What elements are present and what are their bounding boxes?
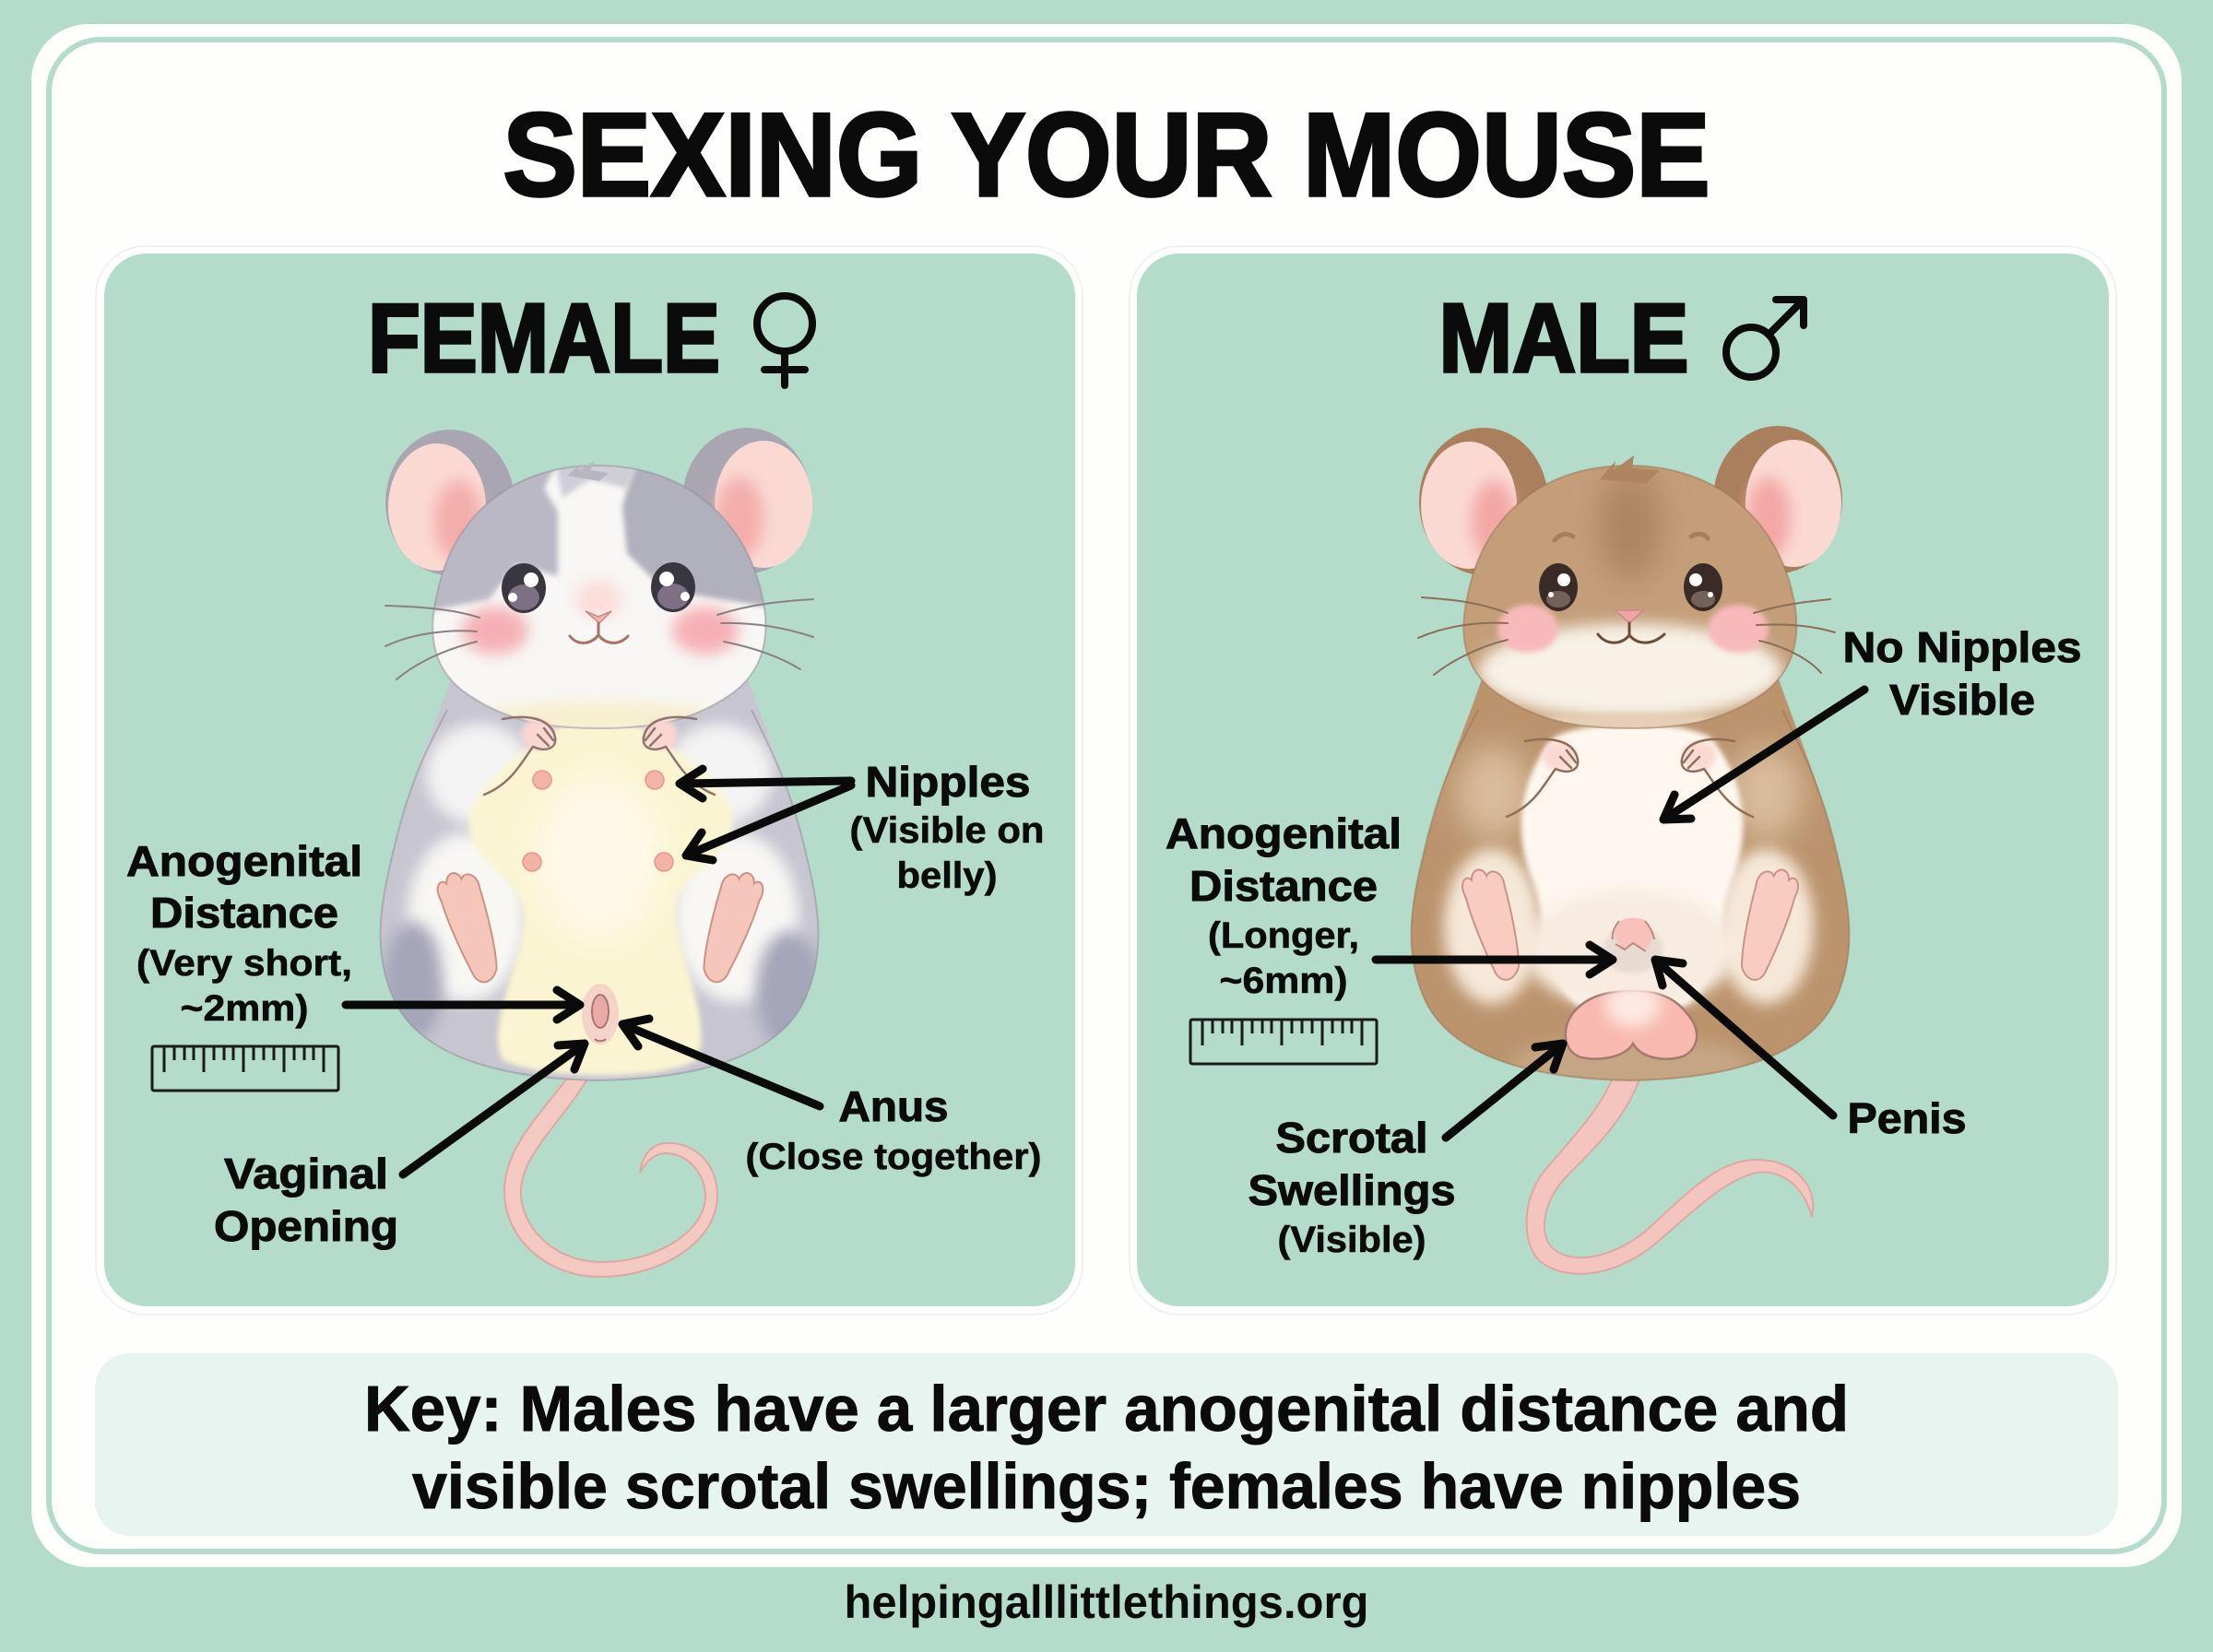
nose and mouth — [570, 611, 628, 643]
icon: ruler female — [152, 1046, 338, 1091]
key text — [364, 1373, 1849, 1522]
arrow: nipples upper — [680, 769, 851, 798]
right ear — [682, 428, 812, 573]
label: nipples: belly) — [896, 856, 998, 896]
heading: male: MALE — [1438, 284, 1689, 393]
label: anogenital distance female: ~2mm) — [181, 988, 308, 1029]
vaginal opening and anus — [582, 984, 619, 1044]
tuft — [567, 461, 609, 481]
left eye — [502, 563, 546, 613]
label: scrotal swellings: Scrotal — [1276, 1114, 1427, 1162]
tuft — [1600, 455, 1660, 484]
head — [1463, 466, 1796, 728]
heading: female: FEMALE — [368, 284, 720, 393]
arrow: anogenital distance male — [1376, 945, 1613, 974]
label: no nipples visible: Visible — [1889, 676, 2035, 724]
arrow: scrotal swellings — [1446, 1044, 1563, 1138]
penis — [1604, 918, 1663, 974]
label: anus: (Close together) — [745, 1137, 1042, 1177]
left ear — [1419, 428, 1548, 575]
tail — [1527, 1069, 1813, 1274]
scrotal swellings — [1566, 983, 1697, 1059]
head — [432, 466, 765, 726]
label: no nipples visible: No Nipples — [1842, 623, 2082, 671]
blush — [462, 607, 739, 655]
label: scrotal swellings: Swellings — [1249, 1166, 1455, 1214]
right eye — [1684, 563, 1722, 611]
label: vaginal opening: Opening — [214, 1202, 398, 1250]
label: no nipples visible — [1842, 623, 2082, 724]
left foot — [1459, 864, 1529, 985]
footer website: helpingalllittlethings.org — [845, 1576, 1368, 1628]
label: anogenital distance male: ~6mm) — [1219, 961, 1348, 1001]
whiskers — [1418, 597, 1835, 675]
left paw — [484, 717, 555, 795]
label: anogenital distance female: (Very short, — [136, 943, 352, 984]
arrow: nipples lower — [686, 785, 851, 860]
label: scrotal swellings: (Visible) — [1278, 1220, 1426, 1260]
panel: male — [1130, 246, 2116, 1315]
label: anogenital distance female: Distance — [150, 889, 338, 937]
whiskers — [385, 599, 813, 679]
label: anus: Anus — [839, 1082, 948, 1130]
label: scrotal swellings — [1249, 1114, 1455, 1260]
left ear — [385, 430, 515, 575]
label: nipples — [850, 758, 1044, 896]
icon: male symbol — [1726, 300, 1804, 377]
left eye — [1539, 563, 1578, 611]
right foot — [1732, 864, 1802, 985]
body — [380, 679, 819, 1080]
arrow: vaginal opening — [403, 1044, 585, 1174]
left paw — [1507, 739, 1578, 817]
right paw — [644, 717, 715, 795]
label: anogenital distance male — [1166, 809, 1402, 1001]
label: anogenital distance female: Anogenital — [126, 837, 362, 885]
label: anogenital distance female — [126, 837, 362, 1029]
right foot — [693, 867, 767, 987]
body — [1411, 678, 1850, 1080]
panel: female — [96, 246, 1083, 1315]
brows — [1555, 534, 1708, 540]
right paw — [1682, 739, 1753, 817]
label: nipples: Nipples — [865, 758, 1031, 806]
arrow: penis — [1655, 960, 1833, 1115]
nose and mouth — [1598, 610, 1664, 643]
arrow: anogenital distance female — [346, 990, 580, 1020]
illustration: female mouse — [369, 428, 830, 1277]
key box — [95, 1353, 2118, 1536]
nipples — [523, 771, 673, 871]
key text: Key: Males have a larger anogenital distance and — [364, 1373, 1849, 1445]
label: vaginal opening — [214, 1150, 398, 1250]
tail — [504, 1069, 717, 1277]
label: anogenital distance male: Distance — [1189, 862, 1378, 910]
title: SEXING YOUR MOUSE — [503, 89, 1710, 221]
illustration: male mouse — [1402, 426, 1863, 1274]
key text: visible scrotal swellings; females have nipples — [412, 1450, 1801, 1522]
blush — [1497, 605, 1769, 653]
right ear — [1713, 426, 1842, 573]
label: nipples: (Visible on — [850, 810, 1044, 851]
label: anogenital distance male: Anogenital — [1166, 809, 1402, 857]
label: anus — [745, 1082, 1042, 1177]
label: anogenital distance male: (Longer, — [1208, 915, 1359, 956]
arrow: no nipples — [1663, 690, 1864, 820]
icon: ruler male — [1190, 1020, 1377, 1064]
icon: female symbol — [757, 296, 812, 385]
label: vaginal opening: Vaginal — [224, 1150, 388, 1198]
label: penis: Penis — [1848, 1094, 1966, 1142]
arrow: anus — [622, 1019, 820, 1106]
left foot — [433, 867, 507, 987]
right eye — [651, 562, 695, 612]
